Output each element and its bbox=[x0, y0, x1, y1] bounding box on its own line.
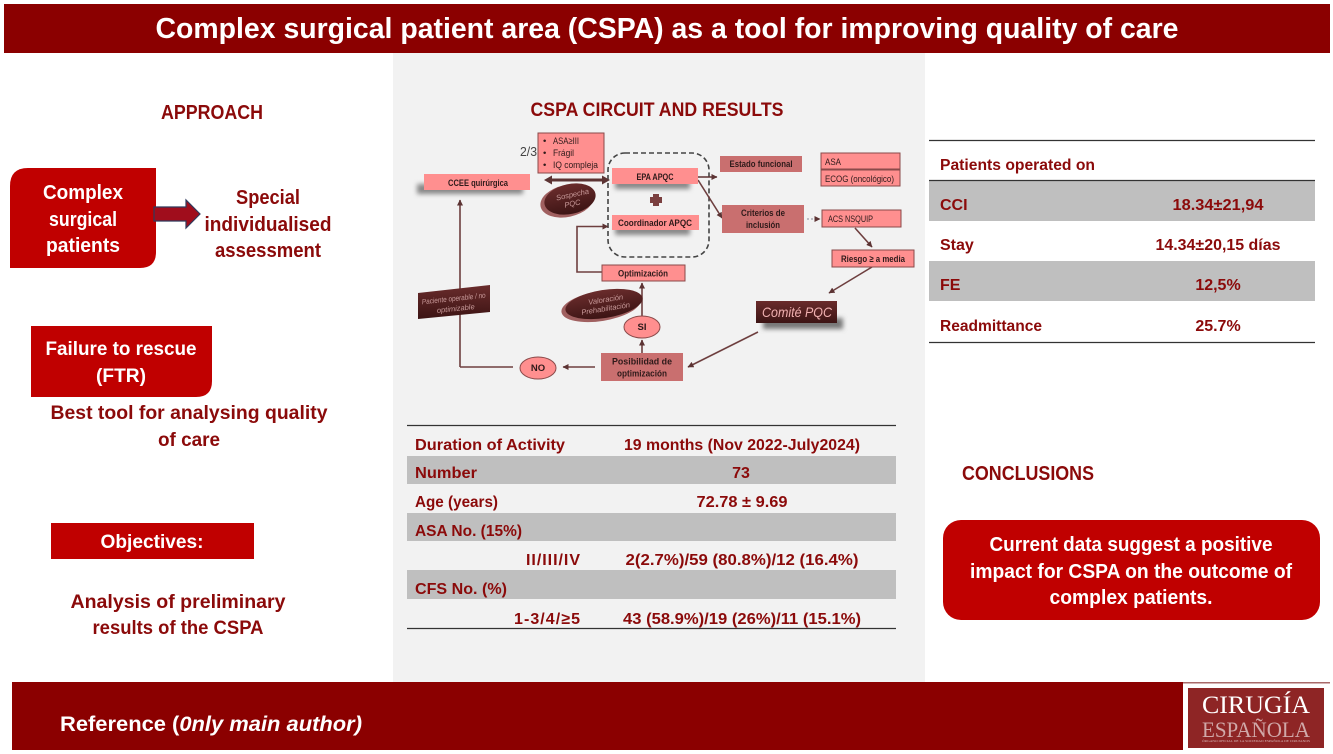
table: patients operated on bbox=[929, 140, 1315, 342]
objectives label: Objectives: bbox=[100, 532, 204, 553]
table: activity data bbox=[407, 426, 896, 628]
table: activity data: Number bbox=[415, 465, 477, 482]
table: patients operated on: Patients operated on bbox=[940, 157, 1095, 174]
title banner bbox=[4, 4, 1330, 53]
table: activity data: 2(2.7%)/59 (80.8%)/12 (16.4%) bbox=[626, 552, 858, 569]
heading: conclusions: CONCLUSIONS bbox=[962, 463, 1094, 485]
table: activity data: 19 months (Nov 2022-July2024) bbox=[624, 437, 860, 454]
text: special individualised assessment bbox=[204, 187, 332, 262]
logo: Cirugia Espanola: ESPAÑOLA bbox=[1202, 717, 1310, 742]
text: special individualised assessment: individualised bbox=[204, 214, 332, 236]
table: activity data: ASA No. (15%) bbox=[415, 523, 522, 540]
text: objectives: Analysis of preliminary bbox=[70, 592, 286, 613]
node: EPA APQC bbox=[612, 168, 698, 189]
table: activity data: CFS No. (%) bbox=[415, 581, 507, 598]
panel: conclusion text bbox=[943, 520, 1320, 620]
panel: complex surgical patients bbox=[10, 168, 156, 268]
node: estado funcional: Estado funcional bbox=[730, 159, 792, 170]
heading: circuit and results: CSPA CIRCUIT AND RESULTS bbox=[530, 100, 784, 121]
node: criteria list: • bbox=[543, 160, 546, 171]
label: 2/3: 2/3 bbox=[520, 144, 537, 159]
table: patients operated on: Stay bbox=[940, 237, 974, 254]
table: patients operated on: Readmittance bbox=[940, 318, 1042, 335]
ellipse: sospecha PQC bbox=[537, 179, 599, 222]
panel: failure to rescue: Failure to rescue bbox=[46, 339, 196, 360]
node: optimizacion: Optimización bbox=[618, 268, 668, 280]
node: NO bbox=[520, 357, 556, 379]
node: criterios de inclusion: Criterios de bbox=[741, 208, 785, 219]
text: special individualised assessment: Special bbox=[236, 187, 300, 209]
ellipse: sospecha PQC: Sospecha bbox=[555, 187, 590, 202]
node: paciente operable: optimizable bbox=[436, 302, 475, 315]
text: best tool: of care bbox=[158, 430, 220, 451]
node: paciente operable bbox=[418, 285, 490, 319]
node: ASA and ECOG bbox=[821, 153, 900, 186]
node: riesgo bbox=[832, 250, 914, 267]
ellipse: sospecha PQC: PQC bbox=[564, 197, 582, 210]
text: objectives: results of the CSPA bbox=[92, 618, 264, 639]
table: activity data: 1-3/4/≥5 bbox=[514, 611, 580, 628]
logo: Cirugia Espanola: ÓRGANO OFICIAL DE LA SOCIEDAD ESPAÑOLA DE CIRUJANOS bbox=[1202, 738, 1310, 743]
node: criterios de inclusion bbox=[722, 205, 804, 233]
text: best tool: Best tool for analysing quality bbox=[50, 403, 328, 424]
node: optimizacion bbox=[602, 265, 685, 281]
reference text: Reference (0nly main author) bbox=[60, 713, 362, 736]
panel: complex surgical patients: surgical bbox=[49, 209, 117, 231]
panel: failure to rescue bbox=[31, 326, 212, 397]
node: posibilidad de optimizacion bbox=[601, 353, 683, 381]
panel: failure to rescue: (FTR) bbox=[96, 366, 146, 387]
arrow: to individualised assessment bbox=[154, 200, 200, 228]
flow diagram bbox=[417, 133, 914, 381]
table: patients operated on: FE bbox=[940, 277, 961, 294]
table: activity data: 72.78 ± 9.69 bbox=[696, 494, 788, 511]
panel: conclusion text: impact for CSPA on the outcome of bbox=[970, 561, 1292, 583]
node: riesgo: Riesgo ≥ a media bbox=[841, 254, 906, 265]
node: criterios de inclusion: inclusión bbox=[746, 220, 780, 231]
logo: Cirugia Espanola bbox=[1183, 682, 1330, 748]
table: activity data: 73 bbox=[732, 465, 750, 482]
table: patients operated on: 25.7% bbox=[1195, 318, 1241, 335]
node: criteria list bbox=[538, 133, 604, 173]
node: NO: NO bbox=[531, 363, 545, 374]
ellipse: valoracion prehabilitacion: Prehabilitación bbox=[581, 300, 631, 317]
dashed group outline bbox=[608, 153, 709, 257]
node: ASA and ECOG: ASA bbox=[825, 157, 842, 168]
table: activity data: Duration of Activity bbox=[415, 437, 565, 454]
table: patients operated on: CCI bbox=[940, 197, 968, 214]
node: paciente operable: Paciente operable / no bbox=[421, 291, 486, 306]
table: activity data: II/III/IV bbox=[526, 552, 580, 569]
node: estado funcional bbox=[720, 156, 802, 172]
table: patients operated on: 12,5% bbox=[1195, 277, 1241, 294]
text: special individualised assessment: assessment bbox=[215, 240, 321, 262]
node: criteria list: • bbox=[543, 148, 546, 159]
node: SI: SI bbox=[638, 322, 646, 333]
node: criteria list: Frágil bbox=[553, 148, 574, 159]
node: EPA APQC: EPA APQC bbox=[636, 172, 674, 183]
panel: central grey background bbox=[393, 53, 925, 682]
node: coordinador APQC bbox=[612, 215, 699, 235]
node: criteria list: • bbox=[543, 136, 546, 147]
footer band bbox=[12, 682, 1183, 750]
node: ACS NSQUIP bbox=[822, 210, 901, 227]
node: coordinador APQC: Coordinador APQC bbox=[618, 218, 692, 229]
logo: Cirugia Espanola: CIRUGÍA bbox=[1202, 691, 1310, 719]
connector arrows bbox=[460, 176, 872, 367]
heading: approach: APPROACH bbox=[161, 102, 263, 124]
node: criteria list: ASA≥III bbox=[553, 136, 579, 147]
node: SI bbox=[624, 316, 660, 338]
title banner: Complex surgical patient area (CSPA) as a tool for improving quality of care bbox=[156, 13, 1178, 45]
icon: plus bbox=[650, 194, 662, 206]
table: patients operated on: 14.34±20,15 días bbox=[1156, 237, 1281, 254]
panel: conclusion text: complex patients. bbox=[1050, 587, 1212, 609]
node: ACS NSQUIP: ACS NSQUIP bbox=[828, 214, 873, 225]
panel: complex surgical patients: patients bbox=[46, 235, 120, 257]
node: comite PQC: Comité PQC bbox=[762, 304, 833, 320]
node: CCEE quirurgica: CCEE quirúrgica bbox=[448, 178, 509, 189]
node: posibilidad de optimizacion: optimización bbox=[617, 368, 667, 380]
table: activity data: 43 (58.9%)/19 (26%)/11 (15.1%) bbox=[623, 611, 861, 628]
node: posibilidad de optimizacion: Posibilidad de bbox=[612, 356, 672, 368]
text: best tool bbox=[50, 403, 328, 451]
node: comite PQC bbox=[756, 301, 843, 329]
node: ASA and ECOG: ECOG (oncológico) bbox=[825, 174, 894, 185]
objectives label bbox=[51, 523, 254, 559]
panel: complex surgical patients: Complex bbox=[43, 182, 123, 204]
ellipse: valoracion prehabilitacion bbox=[559, 284, 645, 327]
table: patients operated on: 18.34±21,94 bbox=[1172, 197, 1264, 214]
text: objectives bbox=[70, 592, 286, 639]
node: criteria list: IQ compleja bbox=[553, 160, 599, 171]
node: CCEE quirurgica bbox=[417, 174, 530, 194]
ellipse: valoracion prehabilitacion: Valoración bbox=[588, 292, 624, 307]
panel: conclusion text: Current data suggest a positive bbox=[990, 534, 1272, 556]
table: activity data: Age (years) bbox=[415, 494, 498, 511]
